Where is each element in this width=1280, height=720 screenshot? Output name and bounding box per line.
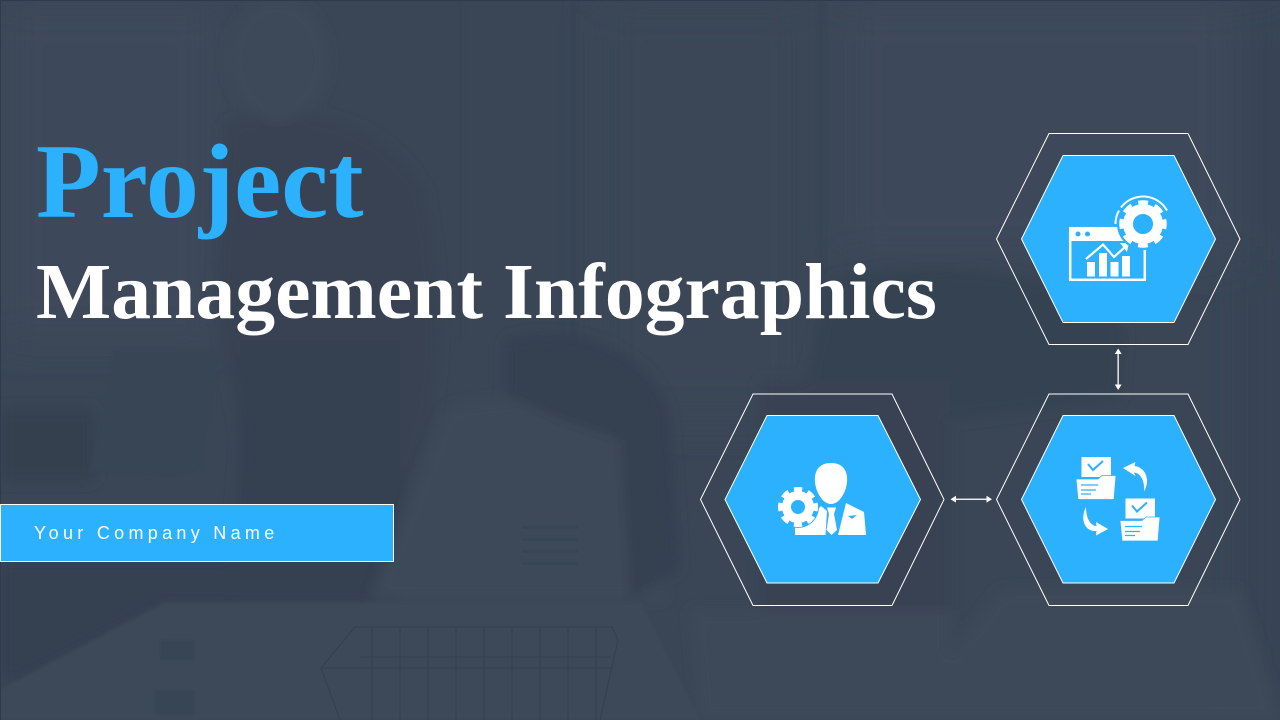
arrow: bottom curved [1083, 507, 1108, 536]
gear [1117, 198, 1169, 250]
company name bar: Your Company Name [34, 523, 279, 543]
folder: upper [1076, 457, 1116, 500]
icon: window chart with gear [1069, 196, 1169, 280]
hexagon: person with gear [700, 394, 944, 606]
title line: Management Infographics: Management Infographics [36, 248, 937, 336]
icon: folders with arrows [1076, 457, 1160, 541]
sweater stripes [522, 526, 578, 565]
company name bar [0, 504, 394, 562]
table [0, 603, 700, 720]
man standing [0, 0, 439, 680]
title line: Project: Project [36, 123, 364, 240]
hexagon: folder exchange [996, 394, 1240, 606]
right person and desk [690, 268, 1280, 720]
arrow: top curved [1123, 462, 1147, 492]
arrow: vertical connector [1115, 348, 1122, 390]
hexagon: analytics [996, 134, 1240, 344]
gear [777, 486, 819, 528]
woman seated [370, 334, 680, 600]
basket [321, 627, 618, 720]
arrow: horizontal connector [950, 496, 992, 503]
icon: businessman and gear [777, 463, 866, 535]
folder: lower [1120, 498, 1160, 541]
